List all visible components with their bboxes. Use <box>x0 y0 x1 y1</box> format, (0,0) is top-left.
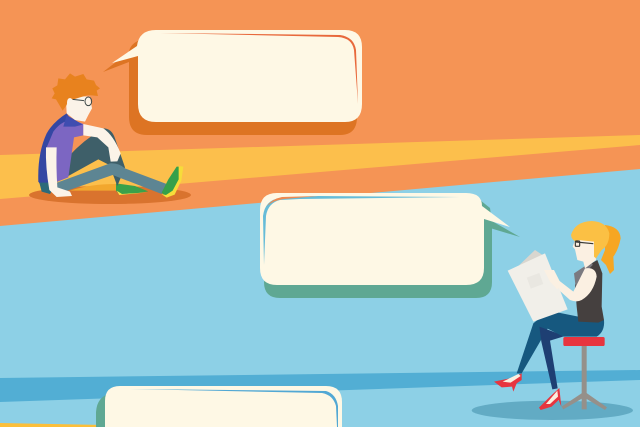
woman: thigh <box>533 313 604 337</box>
woman: back shoe <box>494 373 522 392</box>
woman: newspaper <box>508 250 568 322</box>
bubble 2: shadow tail <box>483 216 520 237</box>
woman: back leg <box>517 322 552 373</box>
man: back leg <box>68 128 125 186</box>
speech bubble 3 <box>96 386 342 427</box>
man: neck and face <box>66 96 92 122</box>
woman reading on a stool <box>472 221 633 420</box>
woman: face and neck <box>573 237 596 268</box>
woman: glasses <box>575 241 593 246</box>
speech bubble 1 <box>103 30 362 135</box>
woman: front leg <box>539 327 565 389</box>
woman: ground shadow <box>472 401 633 420</box>
background: yellow diagonal band <box>0 135 640 199</box>
man: glasses <box>73 97 92 106</box>
man: front arm <box>83 124 121 162</box>
woman: ponytail <box>601 225 621 274</box>
man: rear arm <box>46 147 72 197</box>
woman: stool <box>562 337 607 410</box>
woman: front shoe <box>539 388 561 410</box>
background: darker blue floor band <box>0 370 640 402</box>
man: ear <box>67 98 73 107</box>
woman: arm <box>553 268 597 301</box>
background: yellow corner strip <box>0 423 105 427</box>
woman: vest <box>575 260 604 323</box>
man: hair <box>52 73 100 111</box>
man: torso back <box>38 113 73 184</box>
man: back shoe <box>116 183 148 195</box>
woman: hand <box>544 270 562 289</box>
man: shorts <box>39 183 57 194</box>
man: front leg <box>53 163 167 194</box>
man: ground shadow <box>29 186 191 204</box>
woman: hair <box>571 221 609 258</box>
man: front shoe <box>162 167 181 197</box>
man sitting on the ground <box>29 73 191 204</box>
background: blue lower area <box>0 169 640 427</box>
man: torso <box>47 120 83 183</box>
background: orange upper area <box>0 0 640 240</box>
speech bubble 2 <box>260 193 520 298</box>
